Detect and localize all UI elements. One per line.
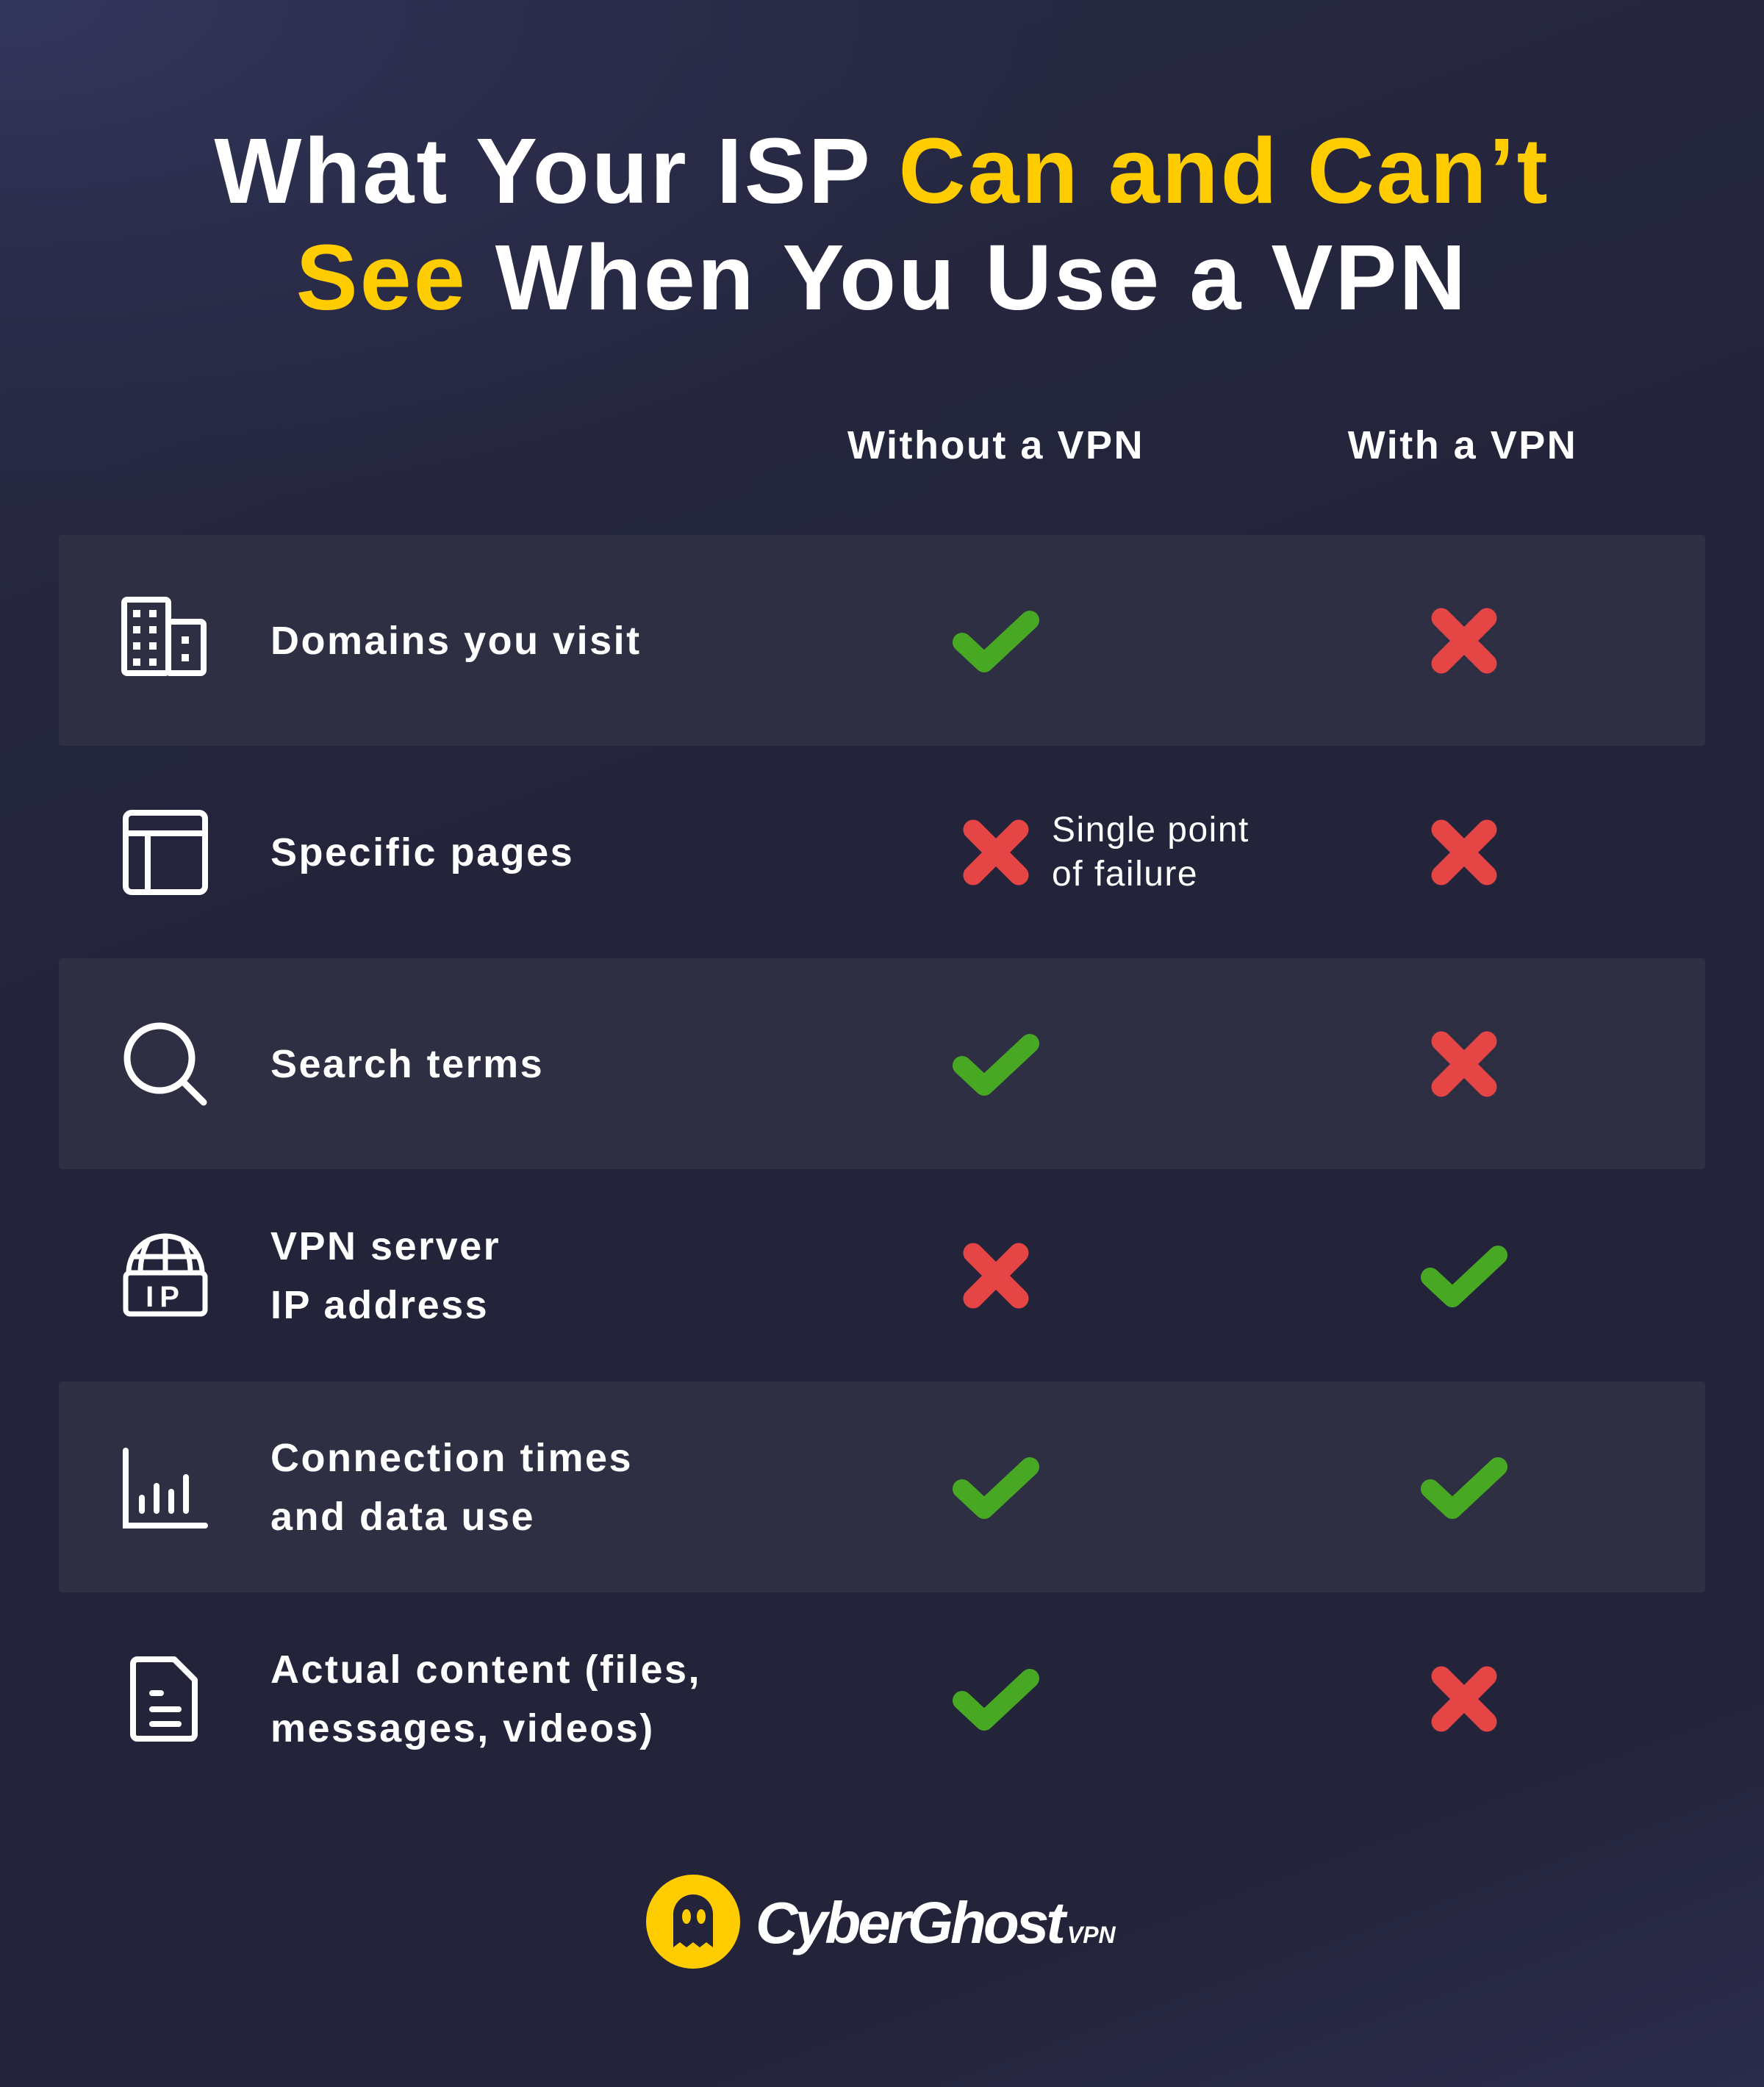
- icon: IP globe: [123, 1233, 207, 1317]
- row band 3: [59, 958, 1705, 1169]
- label: vpn server ip: IP address: [270, 1283, 489, 1327]
- label: connection times: Connection times: [270, 1436, 633, 1480]
- note: single point of failure: [1052, 811, 1250, 894]
- label: connection times: [270, 1436, 633, 1539]
- title: [214, 119, 1550, 329]
- icon: page layout: [123, 810, 208, 895]
- note: single point of failure: Single point: [1052, 811, 1250, 849]
- column header: with: With a VPN: [1348, 423, 1577, 467]
- note: single point of failure: of failure: [1052, 855, 1198, 894]
- logo: [646, 1875, 1116, 1969]
- label: domains: Domains you visit: [270, 619, 642, 663]
- label: vpn server ip: VPN server: [270, 1224, 501, 1268]
- title: What Your ISP Can and Can’t: [214, 119, 1550, 223]
- icon: IP globe: IP: [146, 1281, 185, 1313]
- row band 5: [59, 1382, 1705, 1592]
- label: search terms: Search terms: [270, 1042, 544, 1086]
- label: specific pages: Specific pages: [270, 830, 574, 874]
- logo: CyberGhostVPN: [756, 1890, 1116, 1955]
- title: See When You Use a VPN: [296, 226, 1468, 329]
- label: actual content: Actual content (files,: [270, 1648, 701, 1692]
- icon: search: [123, 1023, 207, 1105]
- column header: without: Without a VPN: [847, 423, 1144, 467]
- label: vpn server ip: [270, 1224, 501, 1327]
- icon: building: [121, 597, 207, 676]
- label: actual content: messages, videos): [270, 1706, 655, 1750]
- icon: bar chart: [123, 1448, 208, 1529]
- icon: document: [130, 1656, 198, 1742]
- label: connection times: and data use: [270, 1495, 535, 1539]
- row band 1: [59, 535, 1705, 746]
- label: actual content: [270, 1648, 701, 1750]
